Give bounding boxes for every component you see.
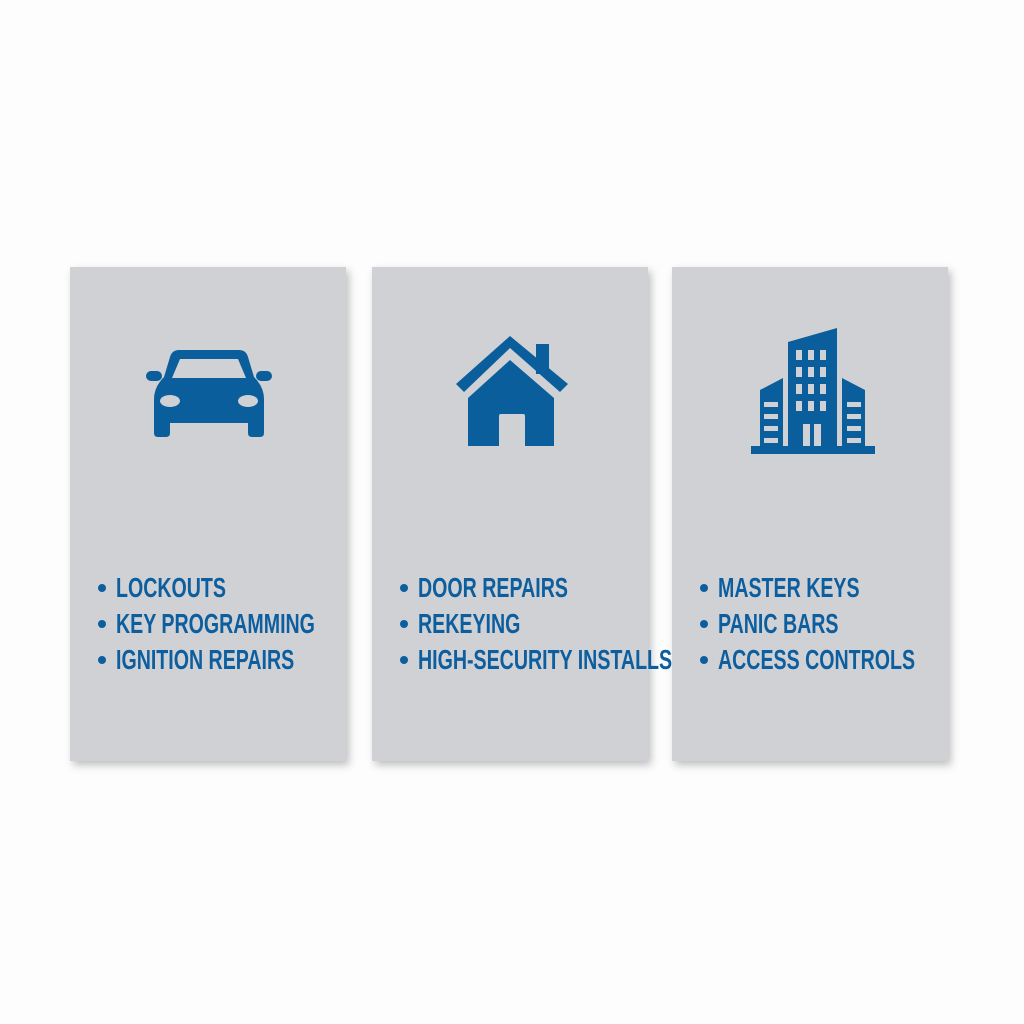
list: residential services: REKEYING [418,608,520,639]
panel: residential [372,267,648,761]
list: residential services: DOOR REPAIRS [418,572,568,603]
list: vehicle services: LOCKOUTS [116,572,226,603]
list: commercial services: ACCESS CONTROLS [718,644,915,675]
list: commercial services: MASTER KEYS [718,572,860,603]
list: residential services: HIGH-SECURITY INSTALLS [418,644,672,675]
list: vehicle services: KEY PROGRAMMING [116,608,315,639]
list: residential services [400,572,672,675]
panel: commercial [672,267,948,761]
list: vehicle services: IGNITION REPAIRS [116,644,294,675]
icon: car [146,350,272,437]
icon: building [751,328,875,454]
panel: vehicle [70,267,346,761]
list: vehicle services [98,572,315,675]
list: commercial services [700,572,915,675]
icon: house [456,336,568,446]
list: commercial services: PANIC BARS [718,608,839,639]
